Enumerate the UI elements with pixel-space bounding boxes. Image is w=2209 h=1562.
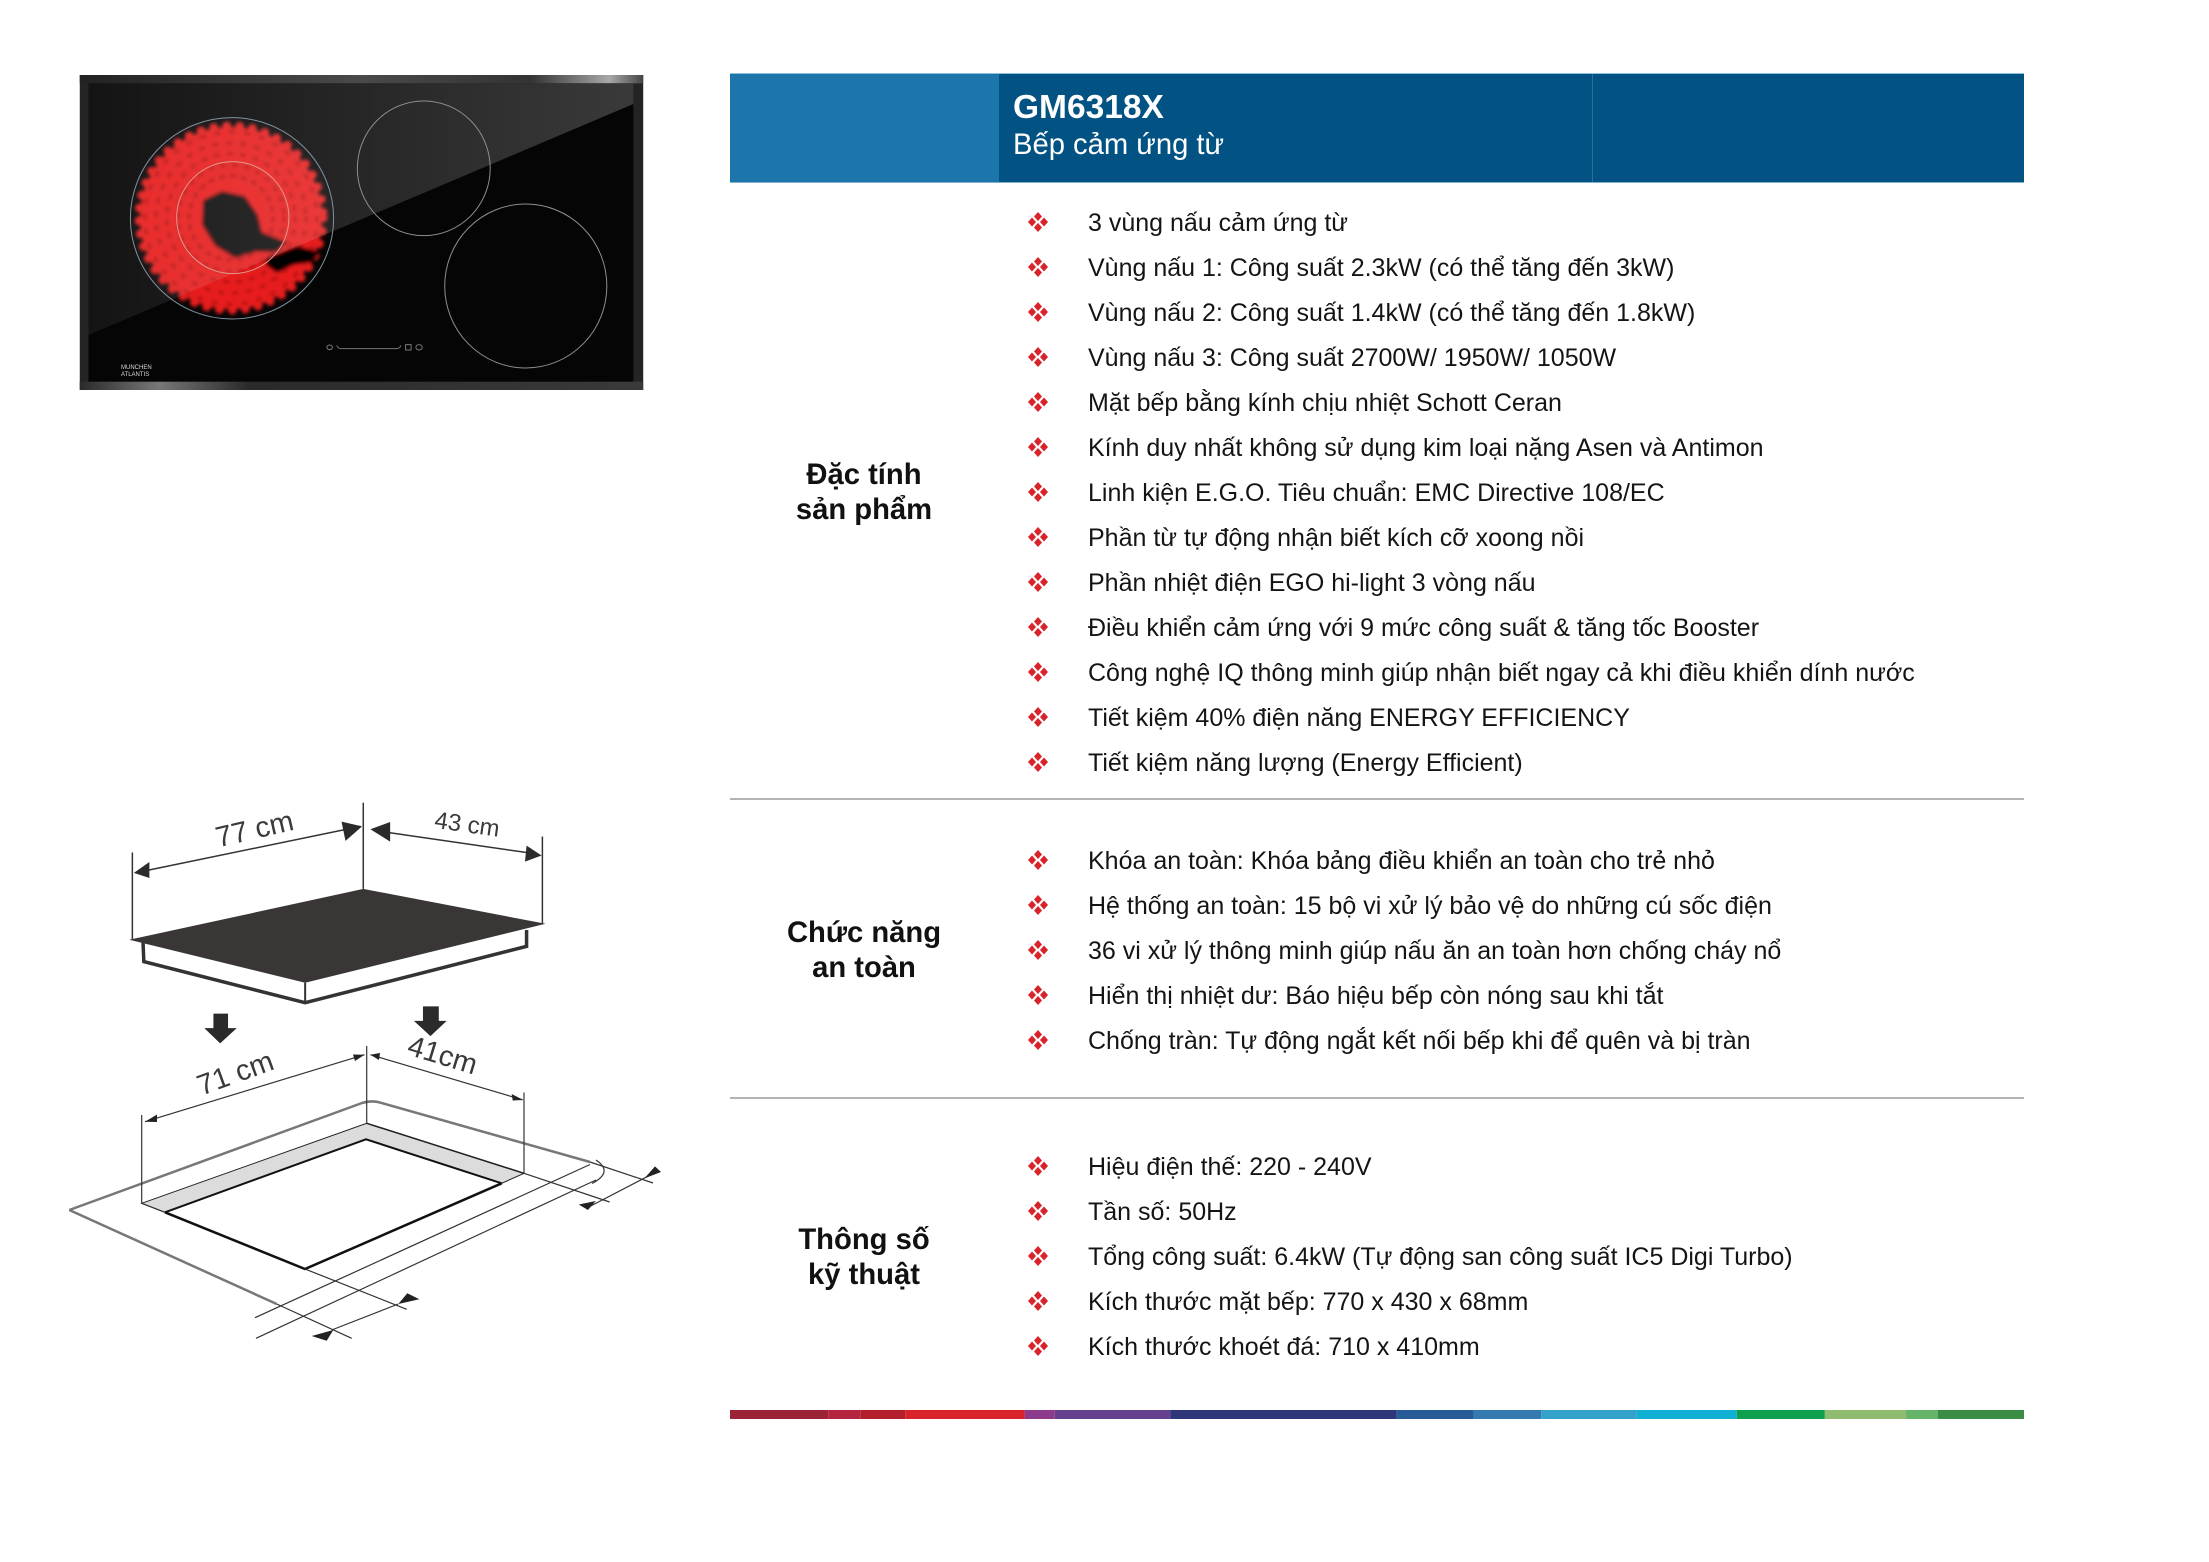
cut-out drawing xyxy=(69,1046,661,1341)
item: Kích thước mặt bếp: 770 x 430 x 68mm xyxy=(1088,1288,1528,1316)
brand text on cooktop: ATLANTIS xyxy=(121,372,149,378)
header left tab xyxy=(730,74,999,182)
item: Hiệu điện thế: 220 - 240V xyxy=(1088,1153,1372,1181)
model name: GM6318X xyxy=(1013,89,1164,126)
item: Khóa an toàn: Khóa bảng điều khiển an toàn cho trẻ nhỏ xyxy=(1088,847,1715,875)
heading: safety functions: an toàn xyxy=(812,952,916,984)
product photo: ceramic cooktop xyxy=(80,75,644,390)
item: Phần từ tự động nhận biết kích cỡ xoong nồi xyxy=(1088,524,1584,552)
heading: technical specs: Thông số xyxy=(798,1224,930,1256)
down arrows xyxy=(204,1006,447,1043)
item: Tổng công suất: 6.4kW (Tự động san công suất IC5 Digi Turbo) xyxy=(1088,1243,1793,1271)
item: Chống tràn: Tự động ngắt kết nối bếp khi để quên và bị tràn xyxy=(1088,1027,1751,1055)
hob body xyxy=(129,889,546,1003)
item: Tiết kiệm 40% điện năng ENERGY EFFICIENCY xyxy=(1088,704,1630,732)
item: Vùng nấu 3: Công suất 2700W/ 1950W/ 1050W xyxy=(1088,344,1616,372)
item: Điều khiển cảm ứng với 9 mức công suất & tăng tốc Booster xyxy=(1088,614,1759,642)
dimension label: 77 cm: 77 cm xyxy=(213,805,297,854)
item: Mặt bếp bằng kính chịu nhiệt Schott Ceran xyxy=(1088,389,1562,417)
heading: safety functions: Chức năng xyxy=(787,917,941,949)
item: Vùng nấu 1: Công suất 2.3kW (có thể tăng đến 3kW) xyxy=(1088,254,1674,282)
item: Kích thước khoét đá: 710 x 410mm xyxy=(1088,1333,1480,1361)
dimension label: 43 cm: 43 cm xyxy=(433,807,501,843)
product type: Bếp cảm ứng từ xyxy=(1013,129,1224,161)
item: Vùng nấu 2: Công suất 1.4kW (có thể tăng đến 1.8kW) xyxy=(1088,299,1695,327)
list: technical specs xyxy=(1028,1153,1793,1361)
brand text on cooktop: MUNCHEN xyxy=(121,365,152,371)
heading: safety functions xyxy=(787,917,941,984)
item: Tần số: 50Hz xyxy=(1088,1198,1237,1226)
heading: product features xyxy=(796,459,932,526)
heading: product features: sản phẩm xyxy=(796,494,932,526)
installation dimensions diagram xyxy=(68,802,661,1341)
item: 3 vùng nấu cảm ứng từ xyxy=(1088,209,1348,237)
heading: product features: Đặc tính xyxy=(806,459,922,491)
item: Công nghệ IQ thông minh giúp nhận biết ngay cả khi điều khiển dính nước xyxy=(1088,659,1915,687)
multicolour footer bar xyxy=(730,1410,2024,1419)
heating element xyxy=(139,126,323,310)
item: Phần nhiệt điện EGO hi-light 3 vòng nấu xyxy=(1088,569,1536,597)
hob dimension lines xyxy=(132,803,542,939)
header column divider xyxy=(1592,74,1593,182)
item: 36 vi xử lý thông minh giúp nấu ăn an toàn hơn chống cháy nổ xyxy=(1088,937,1781,965)
item: Linh kiện E.G.O. Tiêu chuẩn: EMC Directive 108/EC xyxy=(1088,479,1665,507)
item: Kính duy nhất không sử dụng kim loại nặng Asen và Antimon xyxy=(1088,434,1764,462)
item: Hệ thống an toàn: 15 bộ vi xử lý bảo vệ do những cú sốc điện xyxy=(1088,892,1772,920)
list: product features xyxy=(1028,209,1915,777)
list: safety functions xyxy=(1028,847,1781,1055)
heading: technical specs xyxy=(798,1224,930,1290)
header banner xyxy=(730,73,2024,183)
dimension label: 71 cm: 71 cm xyxy=(193,1045,278,1102)
item: Tiết kiệm năng lượng (Energy Efficient) xyxy=(1088,749,1523,777)
item: Hiển thị nhiệt dư: Báo hiệu bếp còn nóng sau khi tắt xyxy=(1088,982,1663,1010)
heading: technical specs: kỹ thuật xyxy=(808,1258,920,1290)
dimension label: 41cm: 41cm xyxy=(404,1030,481,1081)
